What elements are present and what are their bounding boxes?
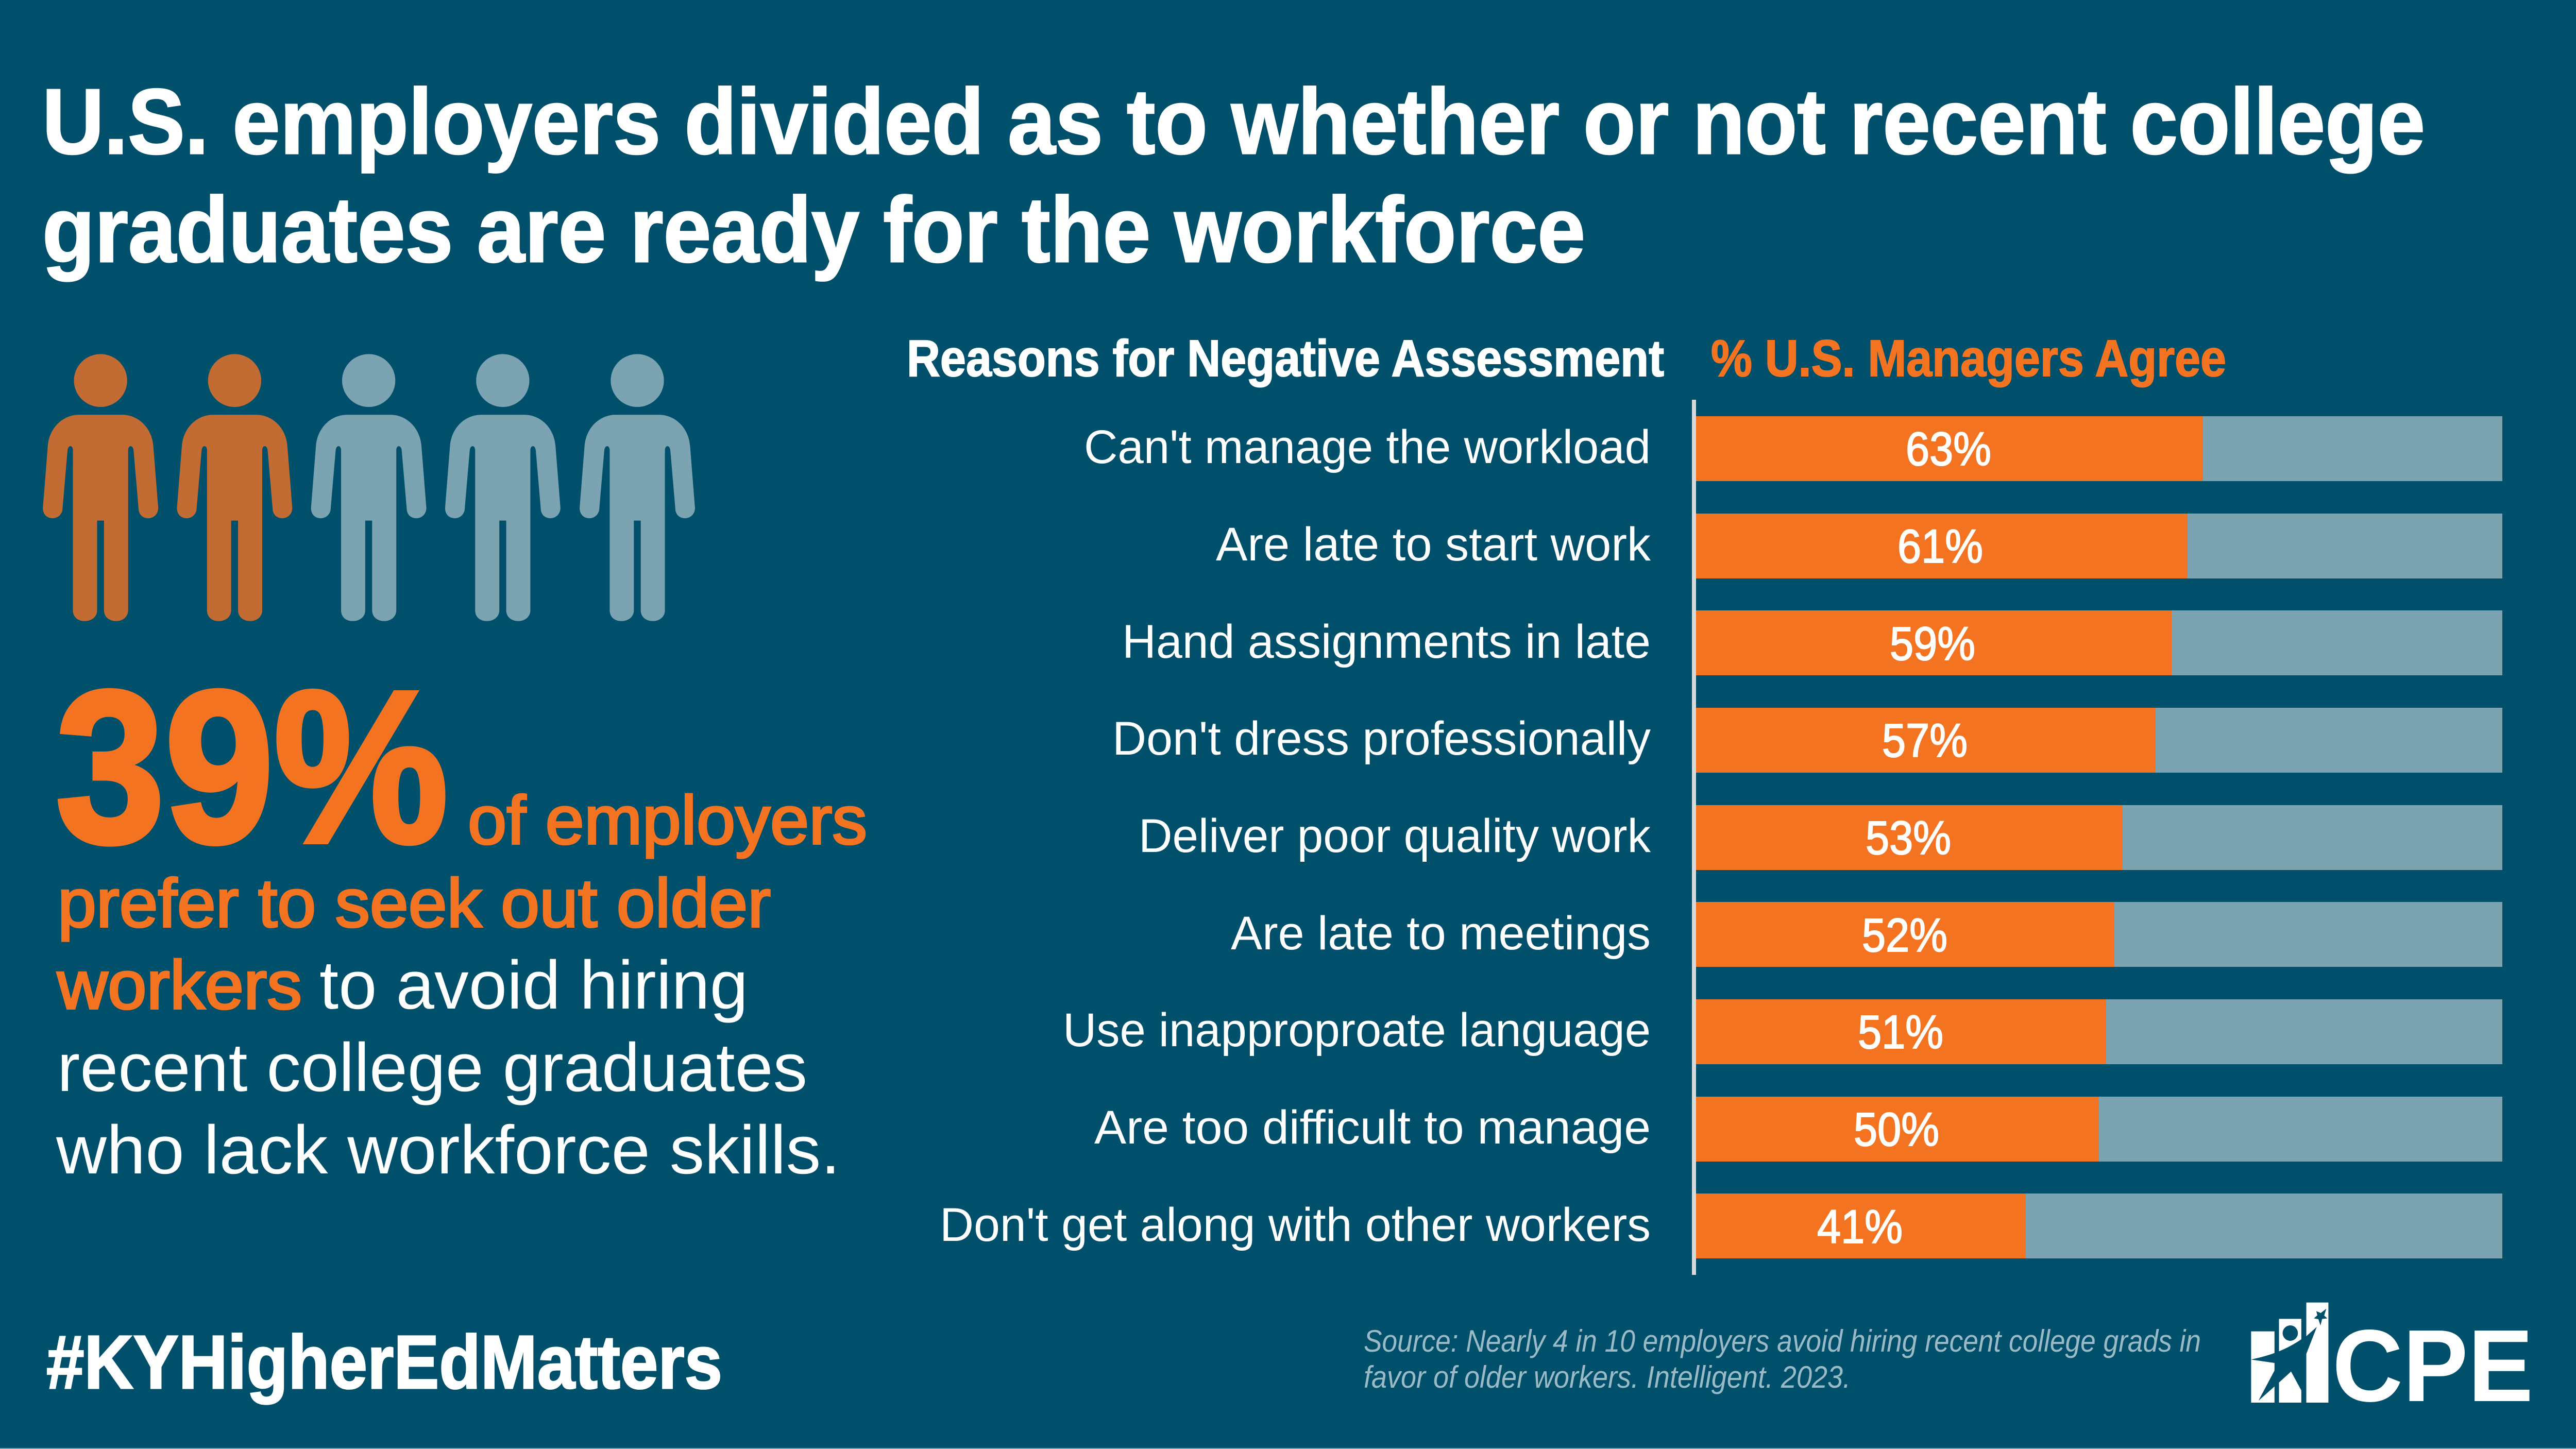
row labels: Are too difficult to manage [1094, 1101, 1651, 1154]
callout text [56, 782, 867, 1188]
title [42, 70, 2425, 282]
title: graduates are ready for the workforce [42, 178, 1585, 282]
callout text: workers [57, 947, 302, 1024]
hashtag: #KYHigherEdMatters [46, 1320, 722, 1405]
icon: star figure bars [2251, 1303, 2328, 1403]
bar chart [940, 400, 2502, 1275]
percentage labels [1817, 423, 1991, 1253]
source note: favor of older workers. Intelligent. 2023. [1364, 1360, 1851, 1394]
percentage labels: 52% [1862, 909, 1947, 962]
logo: CPE [2251, 1303, 2533, 1423]
row labels: Are late to meetings [1231, 907, 1651, 960]
row labels: Don't dress professionally [1112, 712, 1651, 765]
row labels: Hand assignments in late [1122, 616, 1651, 668]
callout text: to avoid hiring [319, 947, 748, 1024]
percentage labels: 41% [1817, 1201, 1903, 1253]
source note: Source: Nearly 4 in 10 employers avoid hiring recent college grads in [1364, 1324, 2201, 1358]
bar values [1696, 416, 2203, 1258]
title: U.S. employers divided as to whether or not recent college [42, 70, 2425, 174]
row labels: Don't get along with other workers [940, 1199, 1651, 1251]
row labels [940, 421, 1651, 1251]
percentage labels: 53% [1866, 812, 1951, 864]
chart heading: reasons: Reasons for Negative Assessment [907, 330, 1664, 387]
row labels: Deliver poor quality work [1139, 810, 1651, 862]
row labels: Can't manage the workload [1084, 421, 1651, 473]
percentage labels: 63% [1906, 423, 1991, 475]
callout text: of employers [468, 782, 867, 859]
callout: 39 percent of employers [56, 646, 867, 1188]
chart heading: managers agree: % U.S. Managers Agree [1711, 330, 2226, 387]
pictogram: five people, two highlighted [43, 354, 695, 621]
percentage labels: 61% [1897, 520, 1983, 573]
axis line [1692, 400, 1696, 1275]
callout text: who lack workforce skills. [56, 1112, 840, 1188]
big statistic: 39% [56, 646, 448, 888]
callout text: prefer to seek out older [58, 865, 771, 942]
source note [1364, 1324, 2201, 1394]
percentage labels: 59% [1890, 618, 1975, 670]
percentage labels: 50% [1854, 1103, 1939, 1156]
percentage labels: 51% [1858, 1006, 1943, 1059]
bar tracks [1696, 416, 2502, 1258]
wordmark: CPE [2332, 1309, 2533, 1423]
percentage labels: 57% [1882, 714, 1968, 767]
callout text: recent college graduates [57, 1030, 807, 1106]
row labels: Use inapproproate language [1063, 1004, 1651, 1056]
row labels: Are late to start work [1216, 518, 1651, 571]
